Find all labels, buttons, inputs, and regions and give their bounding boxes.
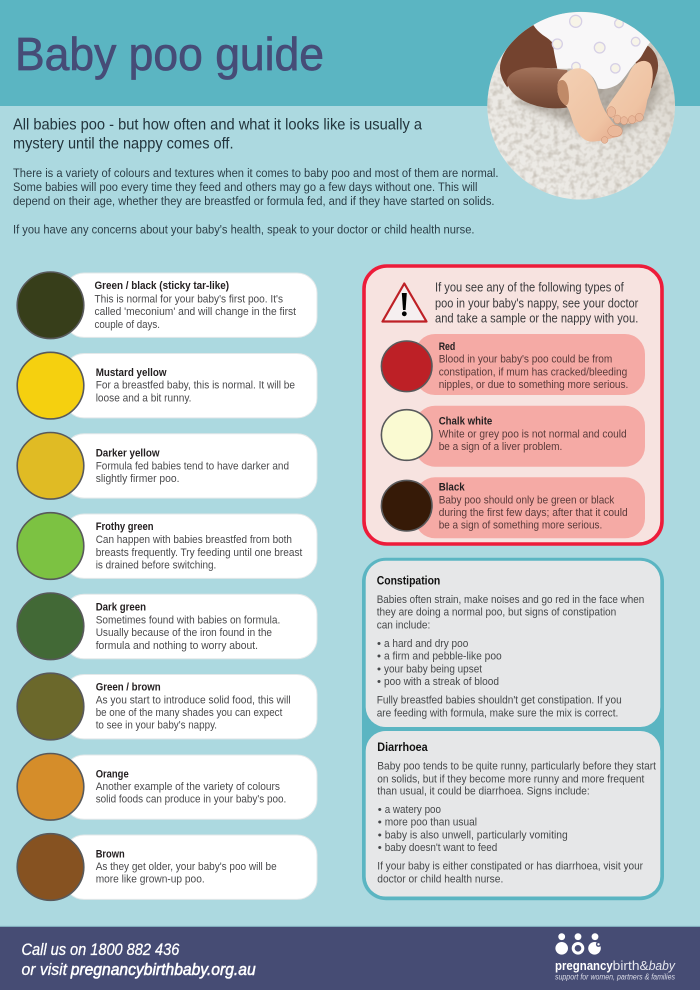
colour row: green / black: couple of days. [94, 319, 160, 331]
warning row: black: during the first few days; after that it could [439, 507, 628, 519]
footer contact text: pregnancybirthbaby.org.au [70, 960, 256, 979]
panel: constipation: your baby being upset [384, 663, 483, 675]
panel: constipation: can include: [377, 619, 430, 631]
intro lead text: All babies poo - but how often and what it looks like is usually a [13, 116, 422, 133]
warning row: red: nipples, or due to something more serious. [439, 379, 628, 391]
panel: diarrhoea: • [378, 804, 382, 816]
icon: warning triangle [382, 284, 426, 322]
warning message: and take a sample or the nappy with you. [435, 311, 638, 326]
colour row: green / brown: to see in your baby's nappy. [96, 720, 217, 732]
logo tagline: support for women, partners & families [555, 972, 675, 981]
intro lead text [13, 116, 422, 152]
colour row: orange: Another example of the variety of colours [96, 781, 280, 793]
panel: diarrhoea: Diarrhoea [377, 740, 428, 754]
panel: constipation: Fully breastfed babies shouldn't get constipation. If you [377, 695, 622, 707]
panel: constipation: a firm and pebble-like poo [384, 651, 502, 663]
panel: constipation: • [377, 663, 381, 675]
intro lead text: mystery until the nappy comes off. [13, 135, 234, 152]
warning row: red: Blood in your baby's poo could be from [439, 354, 612, 366]
footer contact text [22, 940, 256, 979]
colour row: dark green [17, 593, 317, 660]
colour row: orange: Orange [96, 768, 129, 780]
panel: diarrhoea: a watery poo [385, 804, 441, 816]
warning row: black: be a sign of something more serious. [439, 520, 602, 532]
colour row: dark green: formula and nothing to worry about. [96, 640, 258, 652]
colour row: orange [17, 754, 317, 820]
colour row: darker yellow: slightly firmer poo. [96, 473, 180, 485]
panel: constipation: Babies often strain, make noises and go red in the face when [377, 594, 644, 606]
panel: diarrhoea: • [378, 842, 382, 854]
warning row: red: constipation, if mum has cracked/bleeding [439, 366, 627, 378]
warning row: red: Red [439, 341, 455, 353]
warning row: red [381, 334, 645, 395]
panel: constipation: • [377, 676, 381, 688]
colour row: green / black: This is normal for your baby's first poo. It's [94, 293, 283, 305]
colour row: green / brown: Green / brown [96, 682, 161, 694]
colour row: brown: As they get older, your baby's poo will be [96, 861, 277, 873]
panel: diarrhoea: baby is also unwell, particularly vomiting [385, 829, 568, 841]
panel: diarrhoea: • [378, 817, 382, 829]
intro paragraph: If you have any concerns about your baby's health, speak to your doctor or child health nurse. [13, 222, 474, 236]
panel: diarrhoea: more poo than usual [385, 817, 477, 829]
panel: constipation: Constipation [377, 573, 440, 587]
panel: diarrhoea: doctor or child health nurse. [377, 873, 503, 885]
panel: constipation: they are doing a normal poo, but signs of constipation [377, 607, 616, 619]
photo: baby feet on a carpet [483, 8, 680, 203]
warning message [435, 280, 639, 326]
colour row: green / black [17, 272, 317, 339]
title: Baby poo guide [15, 28, 324, 80]
colour row: frothy green: is drained before switching. [96, 560, 216, 572]
warning row: black [381, 477, 645, 538]
colour row: green / brown: As you start to introduce solid food, this will [96, 694, 291, 706]
footer band [0, 926, 700, 990]
colour row: darker yellow [17, 432, 317, 499]
colour row: green / brown [17, 673, 317, 740]
panel: diarrhoea: than usual, it could be diarrhoea. Signs include: [377, 785, 590, 797]
logo: pregnancy birth and baby [555, 933, 676, 981]
intro paragraph: Some babies will poo every time they feed and others may go a few days without one. This will [13, 180, 478, 194]
panel: constipation: poo with a streak of blood [384, 676, 499, 688]
intro paragraph [13, 166, 498, 236]
colour row: darker yellow: Darker yellow [96, 448, 160, 460]
panel: diarrhoea: baby doesn't want to feed [385, 842, 497, 854]
logo: pregnancy birth and baby: baby [649, 959, 676, 973]
warning message: If you see any of the following types of [435, 280, 624, 295]
colour row: green / black: Green / black (sticky tar-like) [94, 280, 229, 292]
intro paragraph: There is a variety of colours and textures when it comes to baby poo and most of them are normal. [13, 166, 498, 180]
colour row: brown: Brown [96, 848, 125, 860]
colour row: brown [17, 834, 317, 900]
panel: diarrhoea [366, 731, 660, 896]
colour row: frothy green: Can happen with babies breastfed from both [96, 534, 292, 546]
panel: diarrhoea: Baby poo tends to be quite runny, particularly before they start [377, 761, 657, 773]
colour row: dark green: Sometimes found with babies on formula. [96, 614, 280, 626]
panel: constipation: • [377, 638, 381, 650]
colour row: darker yellow: Formula fed babies tend to have darker and [96, 460, 289, 472]
warning row: black: Black [439, 482, 465, 494]
colour row: frothy green: Frothy green [96, 521, 154, 533]
colour row: dark green: Usually because of the iron found in the [96, 627, 272, 639]
colour row: mustard yellow: Mustard yellow [96, 367, 167, 379]
icon: three figures [555, 933, 601, 955]
panel: constipation [366, 561, 660, 727]
panel: warning colours [364, 266, 662, 544]
panel: diarrhoea: If your baby is either constipated or has diarrhoea, visit your [377, 861, 643, 873]
colour row: orange: solid foods can produce in your baby's poo. [96, 794, 286, 806]
teal frame behind information panels [362, 558, 664, 900]
footer contact text: Call us on 1800 882 436 [22, 940, 180, 959]
colour row: mustard yellow: For a breastfed baby, this is normal. It will be [96, 380, 295, 392]
warning row: chalk white: be a sign of a liver problem. [439, 441, 562, 453]
colour row: frothy green: breasts frequently. Try feeding until one breast [96, 547, 303, 559]
panel: constipation: • [377, 651, 381, 663]
colour row: green / black: called 'meconium' and will change in the first [94, 306, 297, 318]
intro paragraph: depend on their age, whether they are breastfed or formula fed, and if they have started on solids. [13, 194, 494, 208]
warning row: black: Baby poo should only be green or black [439, 494, 615, 506]
logo wordmark: pregnancy [555, 959, 613, 973]
colour row: frothy green [17, 513, 317, 579]
colour row: mustard yellow: loose and a bit runny. [96, 392, 192, 404]
colour row: green / brown: be one of the many shades you can expect [96, 707, 283, 719]
colour row: mustard yellow [17, 352, 317, 419]
colour row: dark green: Dark green [96, 602, 146, 614]
warning row: chalk white [381, 406, 645, 467]
footer contact text: or visit [22, 960, 68, 979]
panel: diarrhoea: on solids, but if they become more runny and more frequent [377, 773, 645, 785]
header band [0, 0, 700, 106]
logo: pregnancy birth and baby: birth& [613, 959, 649, 973]
warning row: chalk white: Chalk white [439, 416, 492, 428]
panel: constipation: a hard and dry poo [384, 638, 468, 650]
colour row: brown: more like grown-up poo. [96, 874, 205, 886]
panel: constipation: are feeding with formula, make sure the mix is correct. [377, 707, 618, 719]
warning row: chalk white: White or grey poo is not normal and could [439, 428, 627, 440]
warning message: poo in your baby's nappy, see your doctor [435, 295, 639, 310]
panel: diarrhoea: • [378, 829, 382, 841]
